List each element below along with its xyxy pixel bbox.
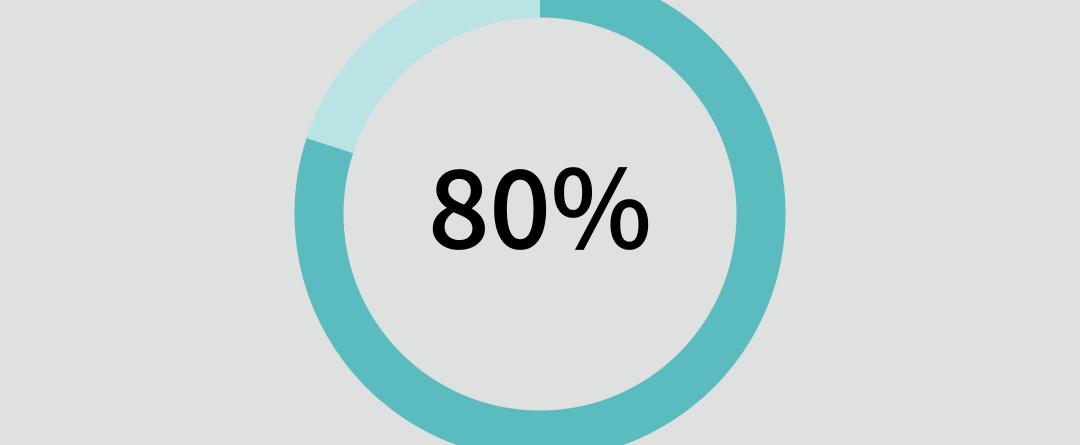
donut ring: remaining 20% segment	[330, 0, 540, 146]
center value label: 80%	[428, 123, 652, 279]
donut ring: filled 80% segment	[319, 0, 761, 435]
